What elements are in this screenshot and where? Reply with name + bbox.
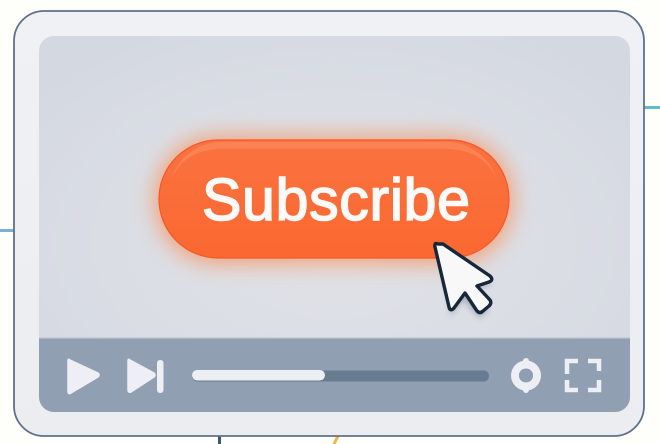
icon: settings knob <box>515 358 537 393</box>
icon: skip next <box>128 359 164 393</box>
button label: Subscribe <box>202 167 470 233</box>
subscribe button <box>155 136 513 264</box>
button body <box>159 140 509 258</box>
icon: mouse cursor <box>435 243 492 318</box>
controls bar background <box>39 337 630 412</box>
progress track <box>192 370 489 382</box>
icon: play <box>68 359 99 394</box>
progress bar <box>192 370 489 382</box>
icon: fullscreen <box>567 361 599 390</box>
connector line stubs <box>0 106 660 444</box>
screen panel <box>39 36 630 412</box>
progress fill <box>192 370 325 380</box>
button glow <box>155 136 513 264</box>
button highlight <box>168 142 500 199</box>
